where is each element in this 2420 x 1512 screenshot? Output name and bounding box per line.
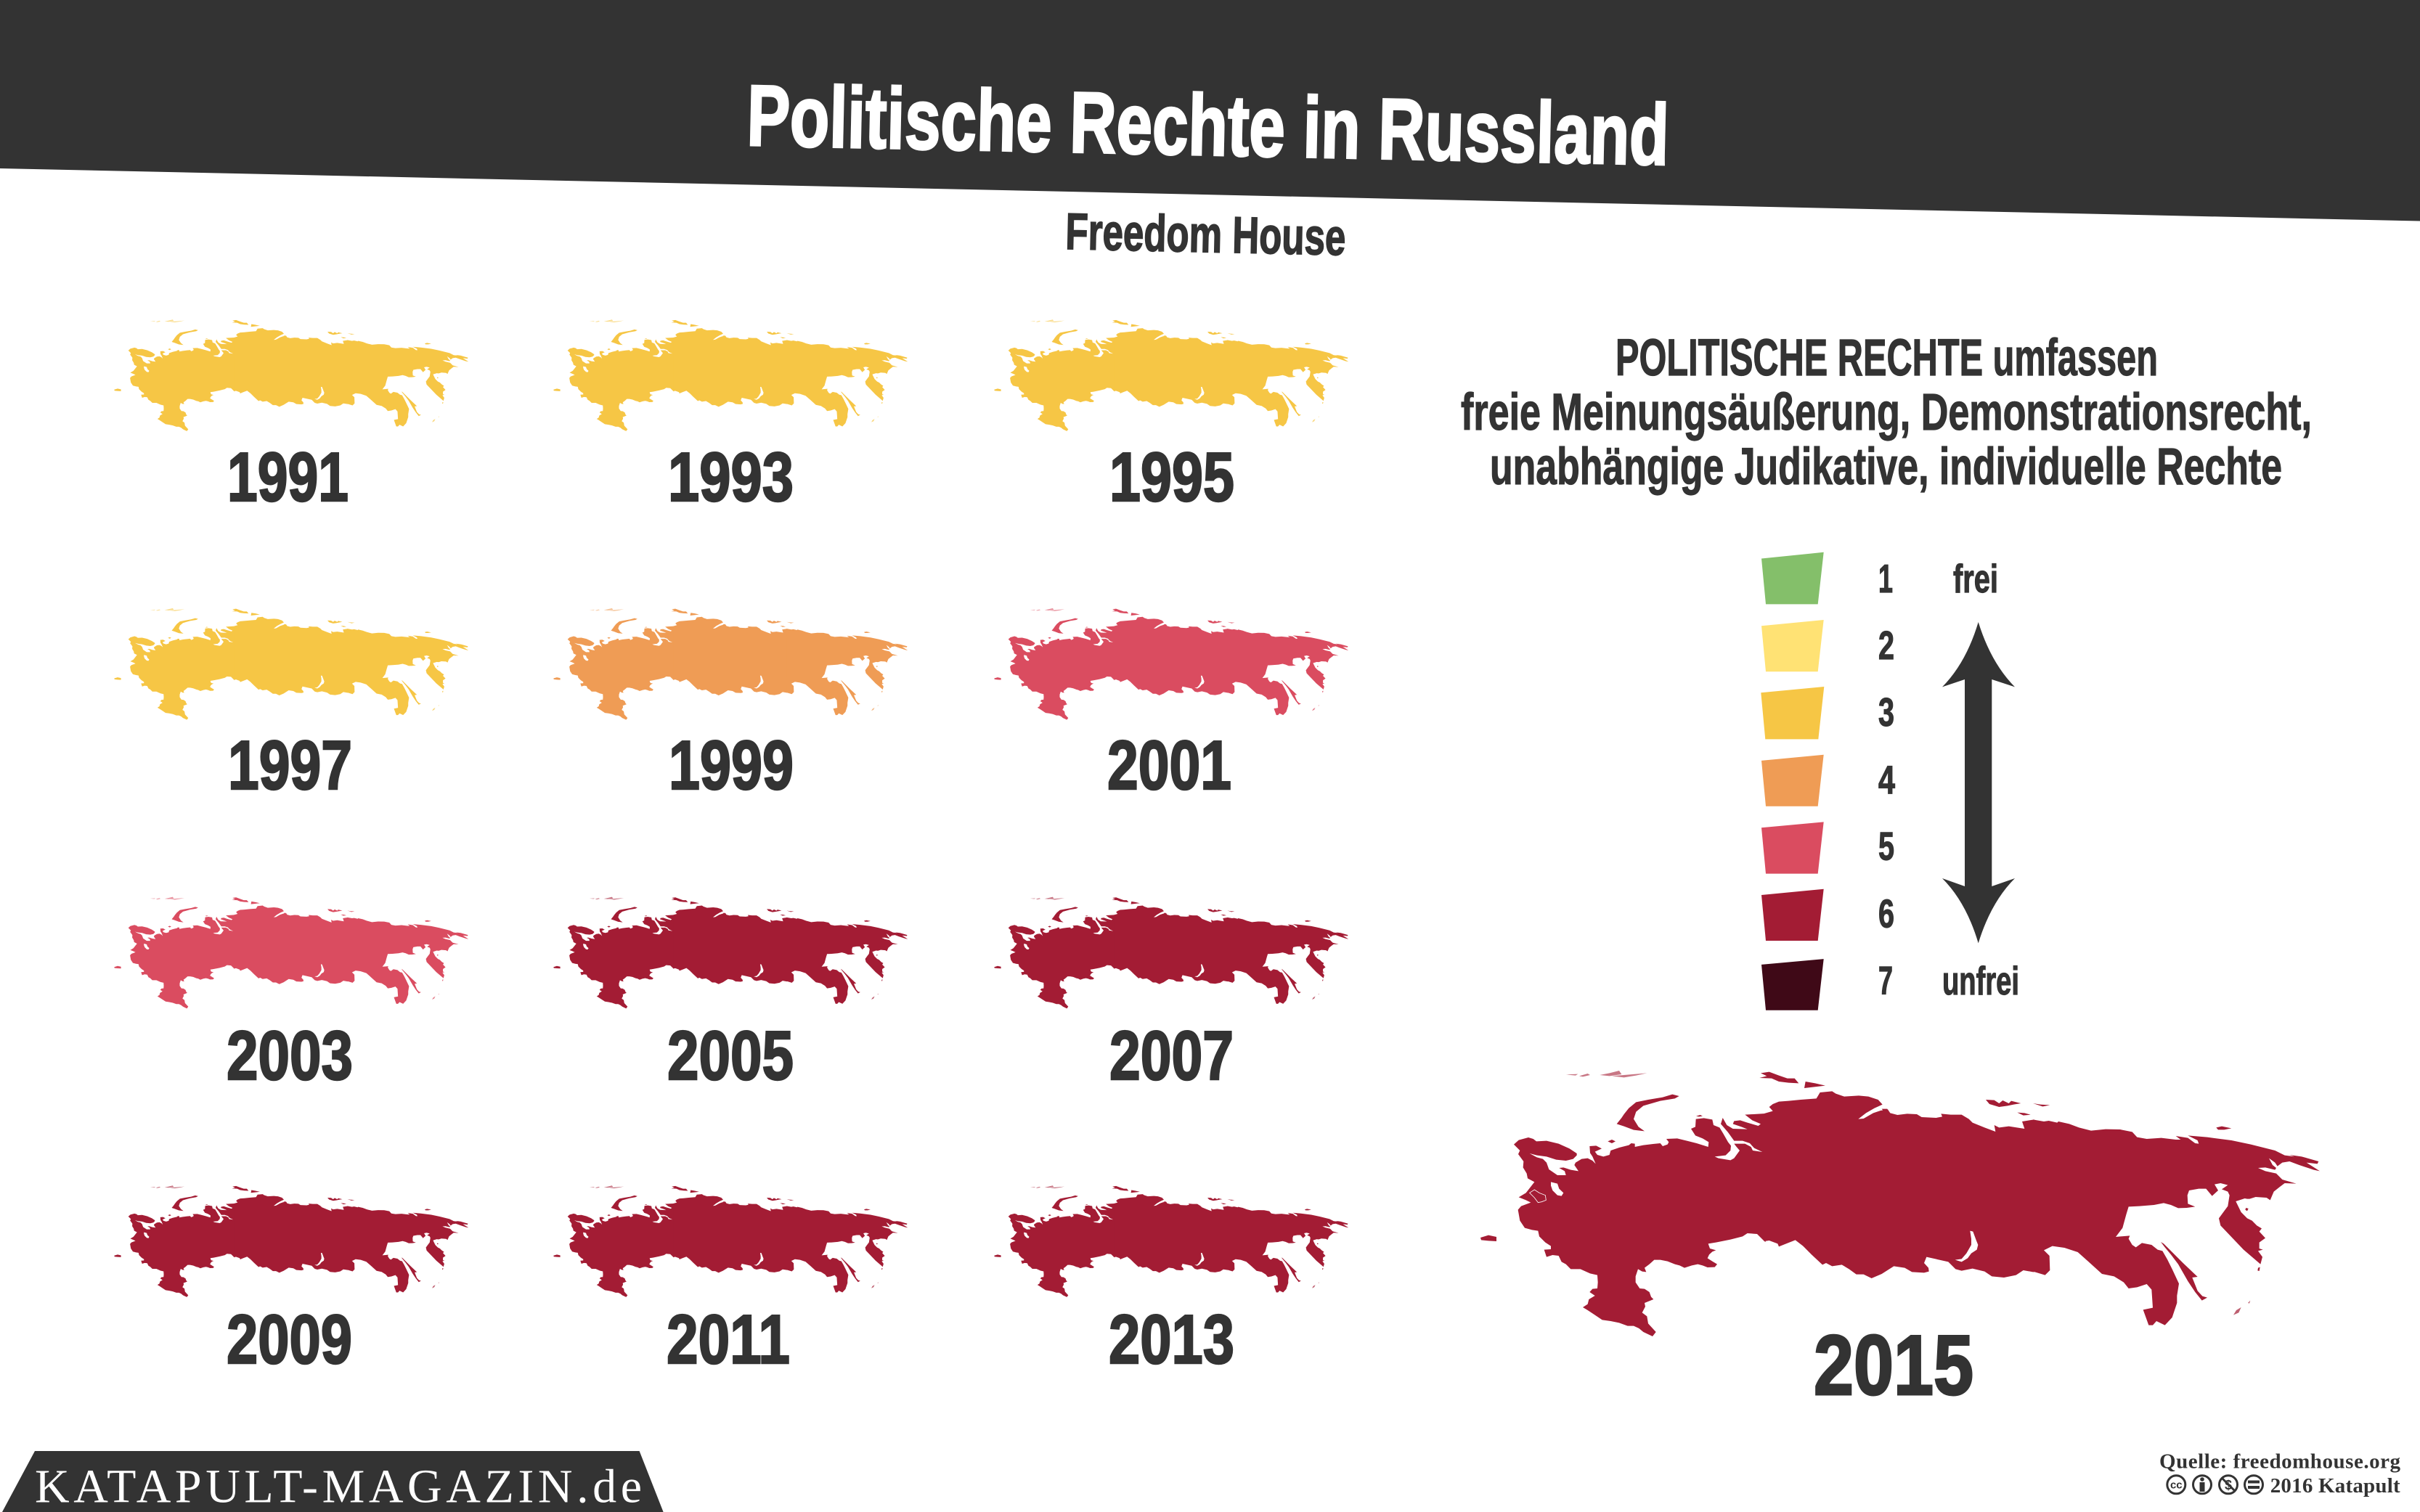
map 1993 <box>553 319 908 516</box>
icon: non-commercial <box>2219 1476 2238 1494</box>
label unfrei: unfrei <box>1942 958 2019 1003</box>
source and licence: 2016 Katapult <box>2270 1474 2400 1497</box>
legend numbers: 2 <box>1878 623 1894 668</box>
map 2011 <box>553 1185 908 1378</box>
map 2005: 2005 <box>667 1017 794 1095</box>
map 1991: 1991 <box>227 438 349 516</box>
map 2003: 2003 <box>227 1017 353 1095</box>
map 2003 <box>114 897 468 1095</box>
legend numbers: 3 <box>1878 690 1894 735</box>
map 2007 <box>994 897 1348 1095</box>
title: Politische Rechte in Russland <box>746 68 1670 184</box>
map 1997 <box>114 608 468 804</box>
label frei: frei <box>1953 556 1998 601</box>
legend swatch 1 <box>1761 552 1824 604</box>
map 2015: 2015 <box>1814 1317 1973 1413</box>
double arrow <box>1942 622 2015 943</box>
definition text block: POLITISCHE RECHTE umfassen <box>1616 330 2158 387</box>
subtitle: Freedom House: Freedom House <box>1065 203 1346 266</box>
legend numbers: 7 <box>1878 958 1893 1003</box>
map 1999 <box>553 608 908 804</box>
legend swatch 2 <box>1761 620 1824 671</box>
map 2001 <box>994 608 1348 804</box>
icon: no derivatives <box>2245 1476 2262 1494</box>
legend swatch 4 <box>1761 755 1824 806</box>
source and licence <box>2159 1450 2400 1497</box>
map 1991 <box>114 319 468 516</box>
map 2015 <box>1480 1071 2320 1413</box>
legend swatch 5 <box>1761 822 1824 874</box>
legend <box>1761 552 2019 1010</box>
map 2007: 2007 <box>1109 1017 1234 1095</box>
icon: non-commercial: $ <box>2225 1478 2232 1492</box>
legend swatch 7 <box>1761 959 1824 1010</box>
legend numbers: 4 <box>1878 757 1895 802</box>
icon: cc <box>2167 1476 2185 1494</box>
source and licence: Quelle: freedomhouse.org <box>2159 1450 2400 1474</box>
legend swatch 3 <box>1761 687 1824 739</box>
map 1997: 1997 <box>228 727 352 804</box>
map 2001: 2001 <box>1107 727 1231 804</box>
legend numbers: 5 <box>1878 823 1894 868</box>
map 2013: 2013 <box>1109 1301 1234 1378</box>
legend numbers: 6 <box>1878 891 1894 936</box>
legend swatch 6 <box>1761 889 1824 941</box>
map 1999: 1999 <box>669 727 794 804</box>
definition text block <box>1461 330 2312 496</box>
map 1995 <box>994 319 1348 516</box>
icon: cc: cc <box>2170 1479 2183 1491</box>
map 2013 <box>994 1185 1348 1378</box>
map 2011: 2011 <box>667 1301 790 1378</box>
map 2005 <box>553 897 908 1095</box>
legend numbers: 1 <box>1878 556 1893 601</box>
icon: attribution <box>2193 1476 2212 1494</box>
map 1993: 1993 <box>668 438 794 516</box>
map 2009 <box>114 1185 468 1378</box>
map 2009: 2009 <box>227 1301 352 1378</box>
header band <box>0 0 2420 221</box>
banner: KATAPULT-MAGAZIN.de: KATAPULT-MAGAZIN.de <box>35 1460 642 1512</box>
map 1995: 1995 <box>1109 438 1234 516</box>
legend numbers <box>1878 556 1895 1003</box>
